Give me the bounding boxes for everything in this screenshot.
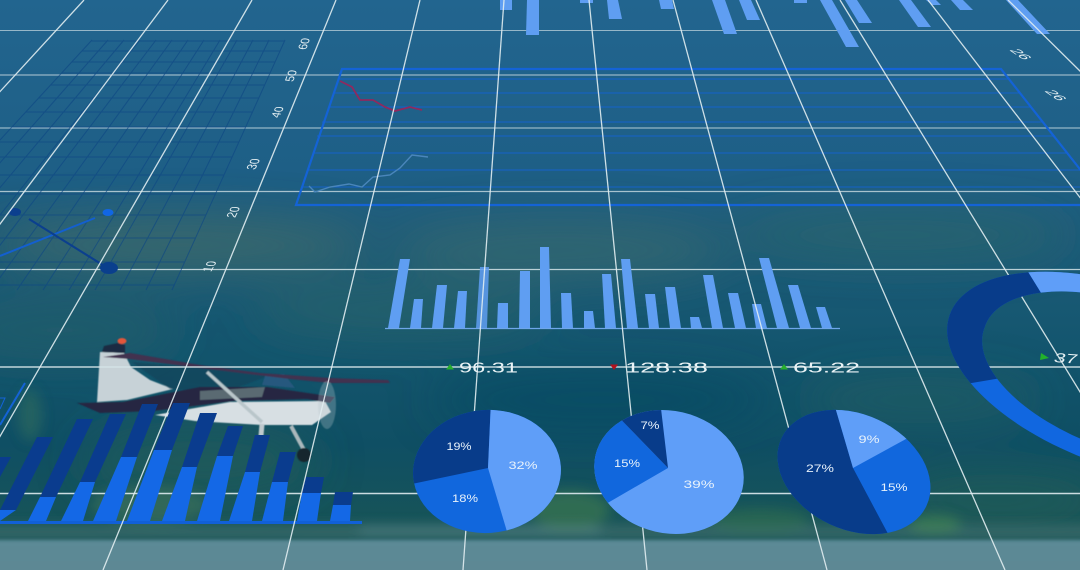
ticker: 128.38 (610, 360, 708, 376)
top inverted bar chart (500, 0, 1050, 47)
y axis labels: 20 (223, 206, 244, 218)
y axis labels: 40 (270, 106, 287, 118)
y axis labels: 50 (283, 69, 301, 82)
center bar chart (385, 247, 840, 328)
pie chart 1: 32% (508, 460, 538, 472)
scatter connector chart (0, 208, 118, 274)
y axis labels (199, 37, 314, 272)
pie chart 2 (594, 410, 744, 534)
ticker: 65.22: 65.22 (793, 360, 860, 376)
y axis labels: 10 (199, 260, 221, 272)
ticker: 96.31: 96.31 (459, 360, 518, 376)
right axis labels: 26 (1040, 89, 1069, 102)
pie chart 1 (413, 410, 561, 534)
right axis labels: 26 (1005, 48, 1034, 61)
pie chart 2: 7% (640, 420, 660, 432)
pie chart 1: 18% (452, 493, 478, 505)
pie chart 2: 39% (684, 479, 715, 491)
ticker: 96.31 (446, 360, 518, 376)
red data line (340, 81, 422, 111)
dark bar segments (0, 403, 353, 510)
pie chart 3 (778, 410, 930, 534)
donut chart (947, 272, 1080, 456)
pie chart 3: 27% (806, 463, 834, 475)
y axis labels: 30 (243, 158, 264, 170)
airplane photo subject (77, 338, 390, 462)
ticker values (446, 360, 860, 376)
blue data line (309, 155, 428, 192)
line chart frame (296, 69, 1080, 205)
light bar segments (0, 450, 351, 521)
ticker: 65.22 (780, 360, 860, 376)
donut chart: 37 (1052, 350, 1080, 366)
pie chart 3: 15% (880, 482, 908, 494)
right axis labels (1005, 48, 1069, 102)
ticker: 128.38: 128.38 (625, 360, 708, 376)
stacked bar chart (0, 383, 362, 524)
pie chart 1: 19% (446, 441, 472, 453)
pie chart 2: 15% (614, 458, 640, 470)
dark perspective grid panel (0, 40, 285, 290)
y axis labels: 60 (296, 37, 314, 50)
pie chart 3: 9% (858, 434, 880, 446)
